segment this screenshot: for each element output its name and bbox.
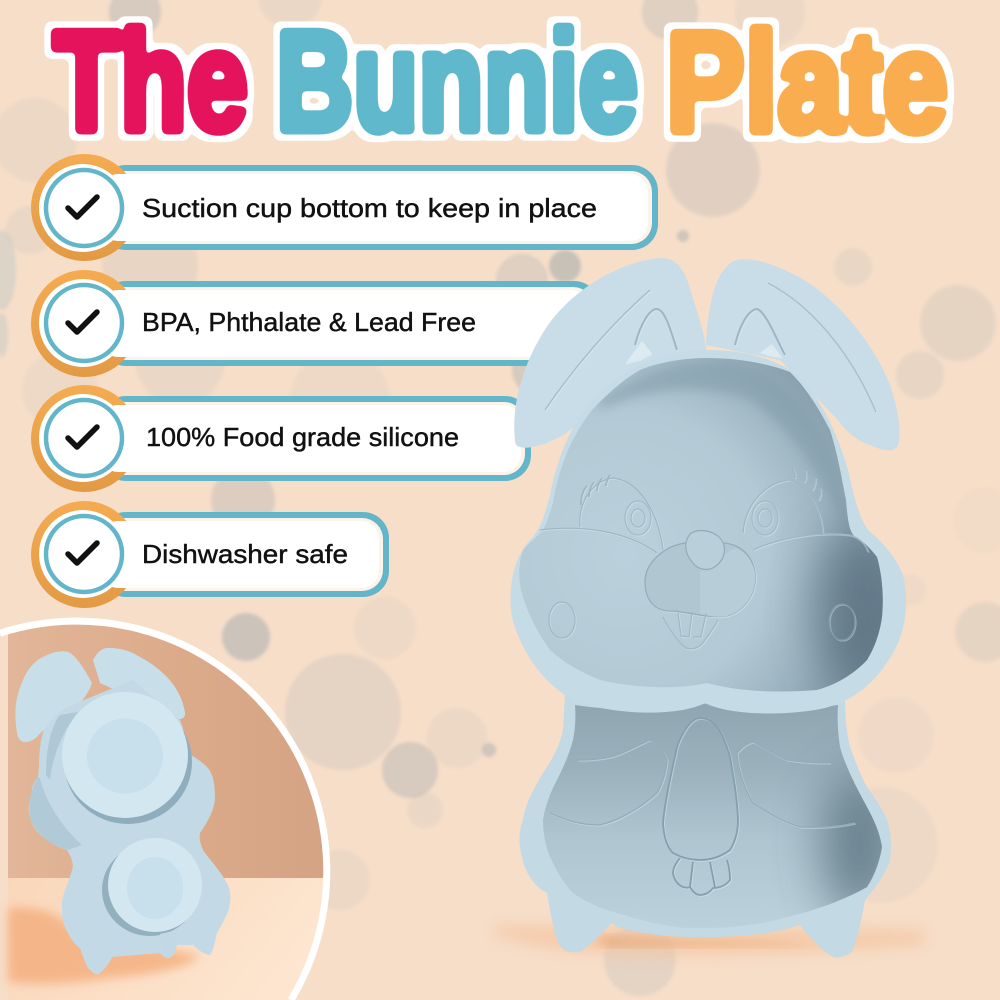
feature 2: BPA free: BPA, Phthalate & Lead Free xyxy=(142,307,476,337)
bunny plate xyxy=(511,258,906,957)
carrot xyxy=(663,718,738,860)
inset photo: back of plate with suction cups xyxy=(0,621,328,1000)
left ear xyxy=(514,258,706,448)
left ear inner detail xyxy=(545,290,677,410)
feature 1: suction cup: Suction cup bottom to keep in place xyxy=(142,193,597,223)
small bunny body xyxy=(29,680,230,974)
right paw xyxy=(737,742,855,827)
large suction cup xyxy=(66,730,192,824)
title word: Plate: Plate xyxy=(666,3,948,162)
feature 1: suction cup xyxy=(31,154,658,261)
head bowl xyxy=(519,358,883,692)
head outer xyxy=(511,350,906,713)
feature 3: food grade: 100% Food grade silicone xyxy=(146,422,459,452)
left paw xyxy=(550,740,667,825)
title word: The: The xyxy=(53,2,248,161)
small bunny left cheek shading xyxy=(29,777,82,850)
feature 4: dishwasher safe xyxy=(31,501,389,608)
title word: Bunnie: Bunnie xyxy=(276,2,638,161)
title xyxy=(53,2,948,162)
lower bowl xyxy=(543,703,882,928)
lower body outer with feet xyxy=(519,695,891,957)
lower bowl right shadow xyxy=(822,770,898,920)
feature 4: dishwasher safe: Dishwasher safe xyxy=(142,539,348,569)
carrot leaves xyxy=(673,858,730,895)
feature 3: food grade xyxy=(31,385,531,492)
right ear inner detail xyxy=(735,283,876,412)
right ear xyxy=(706,259,900,450)
bunny face embossing xyxy=(540,467,868,649)
small bunny left ear xyxy=(15,651,92,742)
feature 2: BPA free xyxy=(31,270,600,377)
small suction cup xyxy=(102,855,186,936)
inset white ring xyxy=(0,621,327,1000)
lower bowl embossing xyxy=(550,718,855,895)
small bunny right ear xyxy=(93,648,185,719)
head shading xyxy=(600,362,905,695)
plate shadow xyxy=(495,925,925,955)
